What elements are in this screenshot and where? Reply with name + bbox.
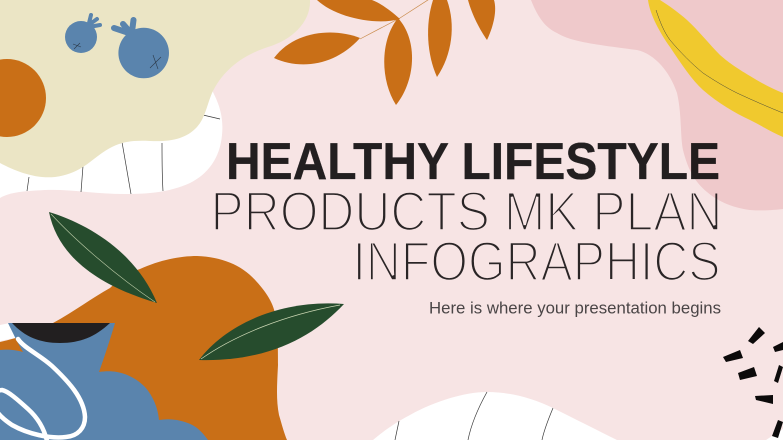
title [210,132,722,292]
black bowl [12,323,110,343]
cream blob: top left [0,0,310,177]
white scrap behind vase [0,323,20,341]
orange circle [0,59,46,137]
white scribble [0,339,85,440]
black dashes [723,327,783,438]
icon: large blueberry [114,20,169,78]
green leaf: lower [199,303,344,360]
white blob with lines: bottom centre [373,392,617,440]
title line 3: INFOGRAPHICS [352,229,720,292]
banana [648,0,783,137]
white corner blob: bottom right [766,429,783,440]
large orange blob [0,256,287,440]
orange leaf branch [274,0,495,105]
green leaf: upper [49,212,157,303]
white blob with lines: top left [0,90,222,198]
icon: small blueberry [65,15,100,53]
blue vase and cloud [0,323,208,440]
title line 2: PRODUCTS MK PLAN [210,179,722,242]
subtitle: Here is where your presentation begins [429,300,721,318]
title line 1: HEALTHY LIFESTYLE [226,132,720,190]
pink blob: top right [531,0,783,210]
